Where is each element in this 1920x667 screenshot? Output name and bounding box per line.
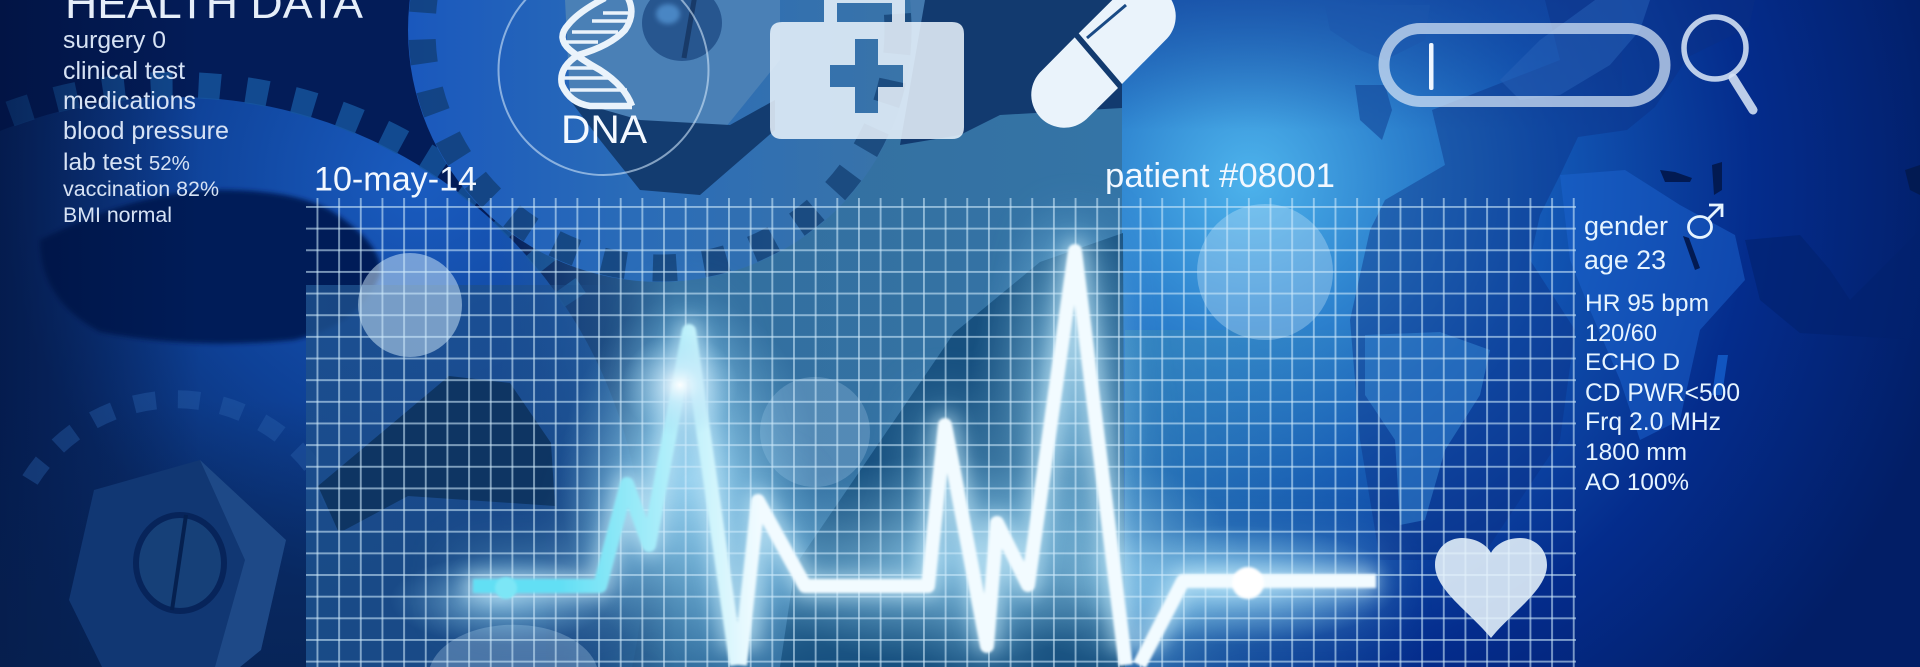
map: South America land bbox=[1365, 332, 1490, 525]
icon: male symbol bbox=[1688, 205, 1722, 238]
lower-left large gear bbox=[0, 85, 643, 667]
map: arctic islands bbox=[1325, 5, 1430, 60]
text block: patient vitals: 1800 mm bbox=[1585, 439, 1687, 466]
text block: patient vitals: AO 100% bbox=[1585, 469, 1689, 496]
steel centre panel bbox=[500, 95, 1125, 667]
grid-left steel tint bbox=[306, 285, 626, 667]
hex nut bbox=[565, 0, 780, 195]
upper gear bbox=[408, 0, 912, 282]
map: Europe and Africa land bbox=[1560, 170, 1745, 440]
translucent circles bbox=[358, 253, 462, 357]
text block: health data: clinical test bbox=[63, 57, 185, 85]
text block: patient vitals: 120/60 bbox=[1585, 321, 1657, 347]
text block: patient vitals: age 23 bbox=[1584, 245, 1666, 275]
text block: patient vitals: CD PWR<500 bbox=[1585, 380, 1740, 407]
pulse dots bbox=[495, 577, 517, 599]
patient label: patient #08001 bbox=[1105, 157, 1335, 195]
gear teeth ring lower bbox=[30, 399, 340, 520]
left vignette bbox=[0, 0, 200, 667]
text block: patient vitals: ECHO D bbox=[1585, 349, 1680, 376]
text block: patient vitals: HR 95 bpm bbox=[1585, 290, 1709, 317]
map: dark seas bbox=[1660, 162, 1920, 270]
dark mechanism bbox=[318, 376, 555, 533]
text block: patient vitals bbox=[1584, 211, 1740, 496]
text block: health data: lab test 52% bbox=[63, 149, 190, 176]
DNA label: DNA bbox=[561, 108, 647, 152]
lower-left nut bbox=[69, 460, 286, 667]
text block: patient vitals: Frq 2.0 MHz bbox=[1585, 409, 1721, 436]
map panel bbox=[1122, 0, 1920, 667]
text block: health data: vaccination 82% bbox=[63, 178, 219, 201]
map: Madagascar bbox=[1712, 355, 1728, 395]
text block: patient vitals: gender bbox=[1584, 211, 1668, 241]
ECG glow bbox=[390, 200, 1400, 665]
search box bbox=[1384, 28, 1665, 102]
text block: health data: blood pressure bbox=[63, 117, 229, 145]
lower-left shading bbox=[0, 400, 306, 667]
icon: medical bag bbox=[770, 0, 964, 139]
icon: pill bbox=[1031, 0, 1176, 128]
text block: health data bbox=[63, 0, 364, 227]
icon: DNA circle bbox=[498, 0, 708, 175]
text block: health data: medications bbox=[63, 87, 196, 115]
icon: DNA helix bbox=[561, 0, 632, 106]
grid bbox=[306, 198, 1576, 667]
date label: 10-may-14 bbox=[314, 160, 477, 198]
text block: health data: surgery 0 bbox=[63, 27, 166, 54]
upper dark region bbox=[900, 0, 1122, 145]
central wedge bbox=[780, 233, 1125, 667]
heart bbox=[1435, 538, 1547, 638]
dark gear shadow bbox=[40, 190, 380, 344]
map: Greenland bbox=[1500, 0, 1650, 100]
map: dark ocean bbox=[1350, 0, 1755, 560]
ECG line bbox=[465, 251, 1376, 665]
icon: magnifying glass bbox=[1684, 17, 1753, 110]
map: Asia dark land bbox=[1745, 230, 1920, 340]
text block: health data: BMI normal bbox=[63, 204, 172, 227]
